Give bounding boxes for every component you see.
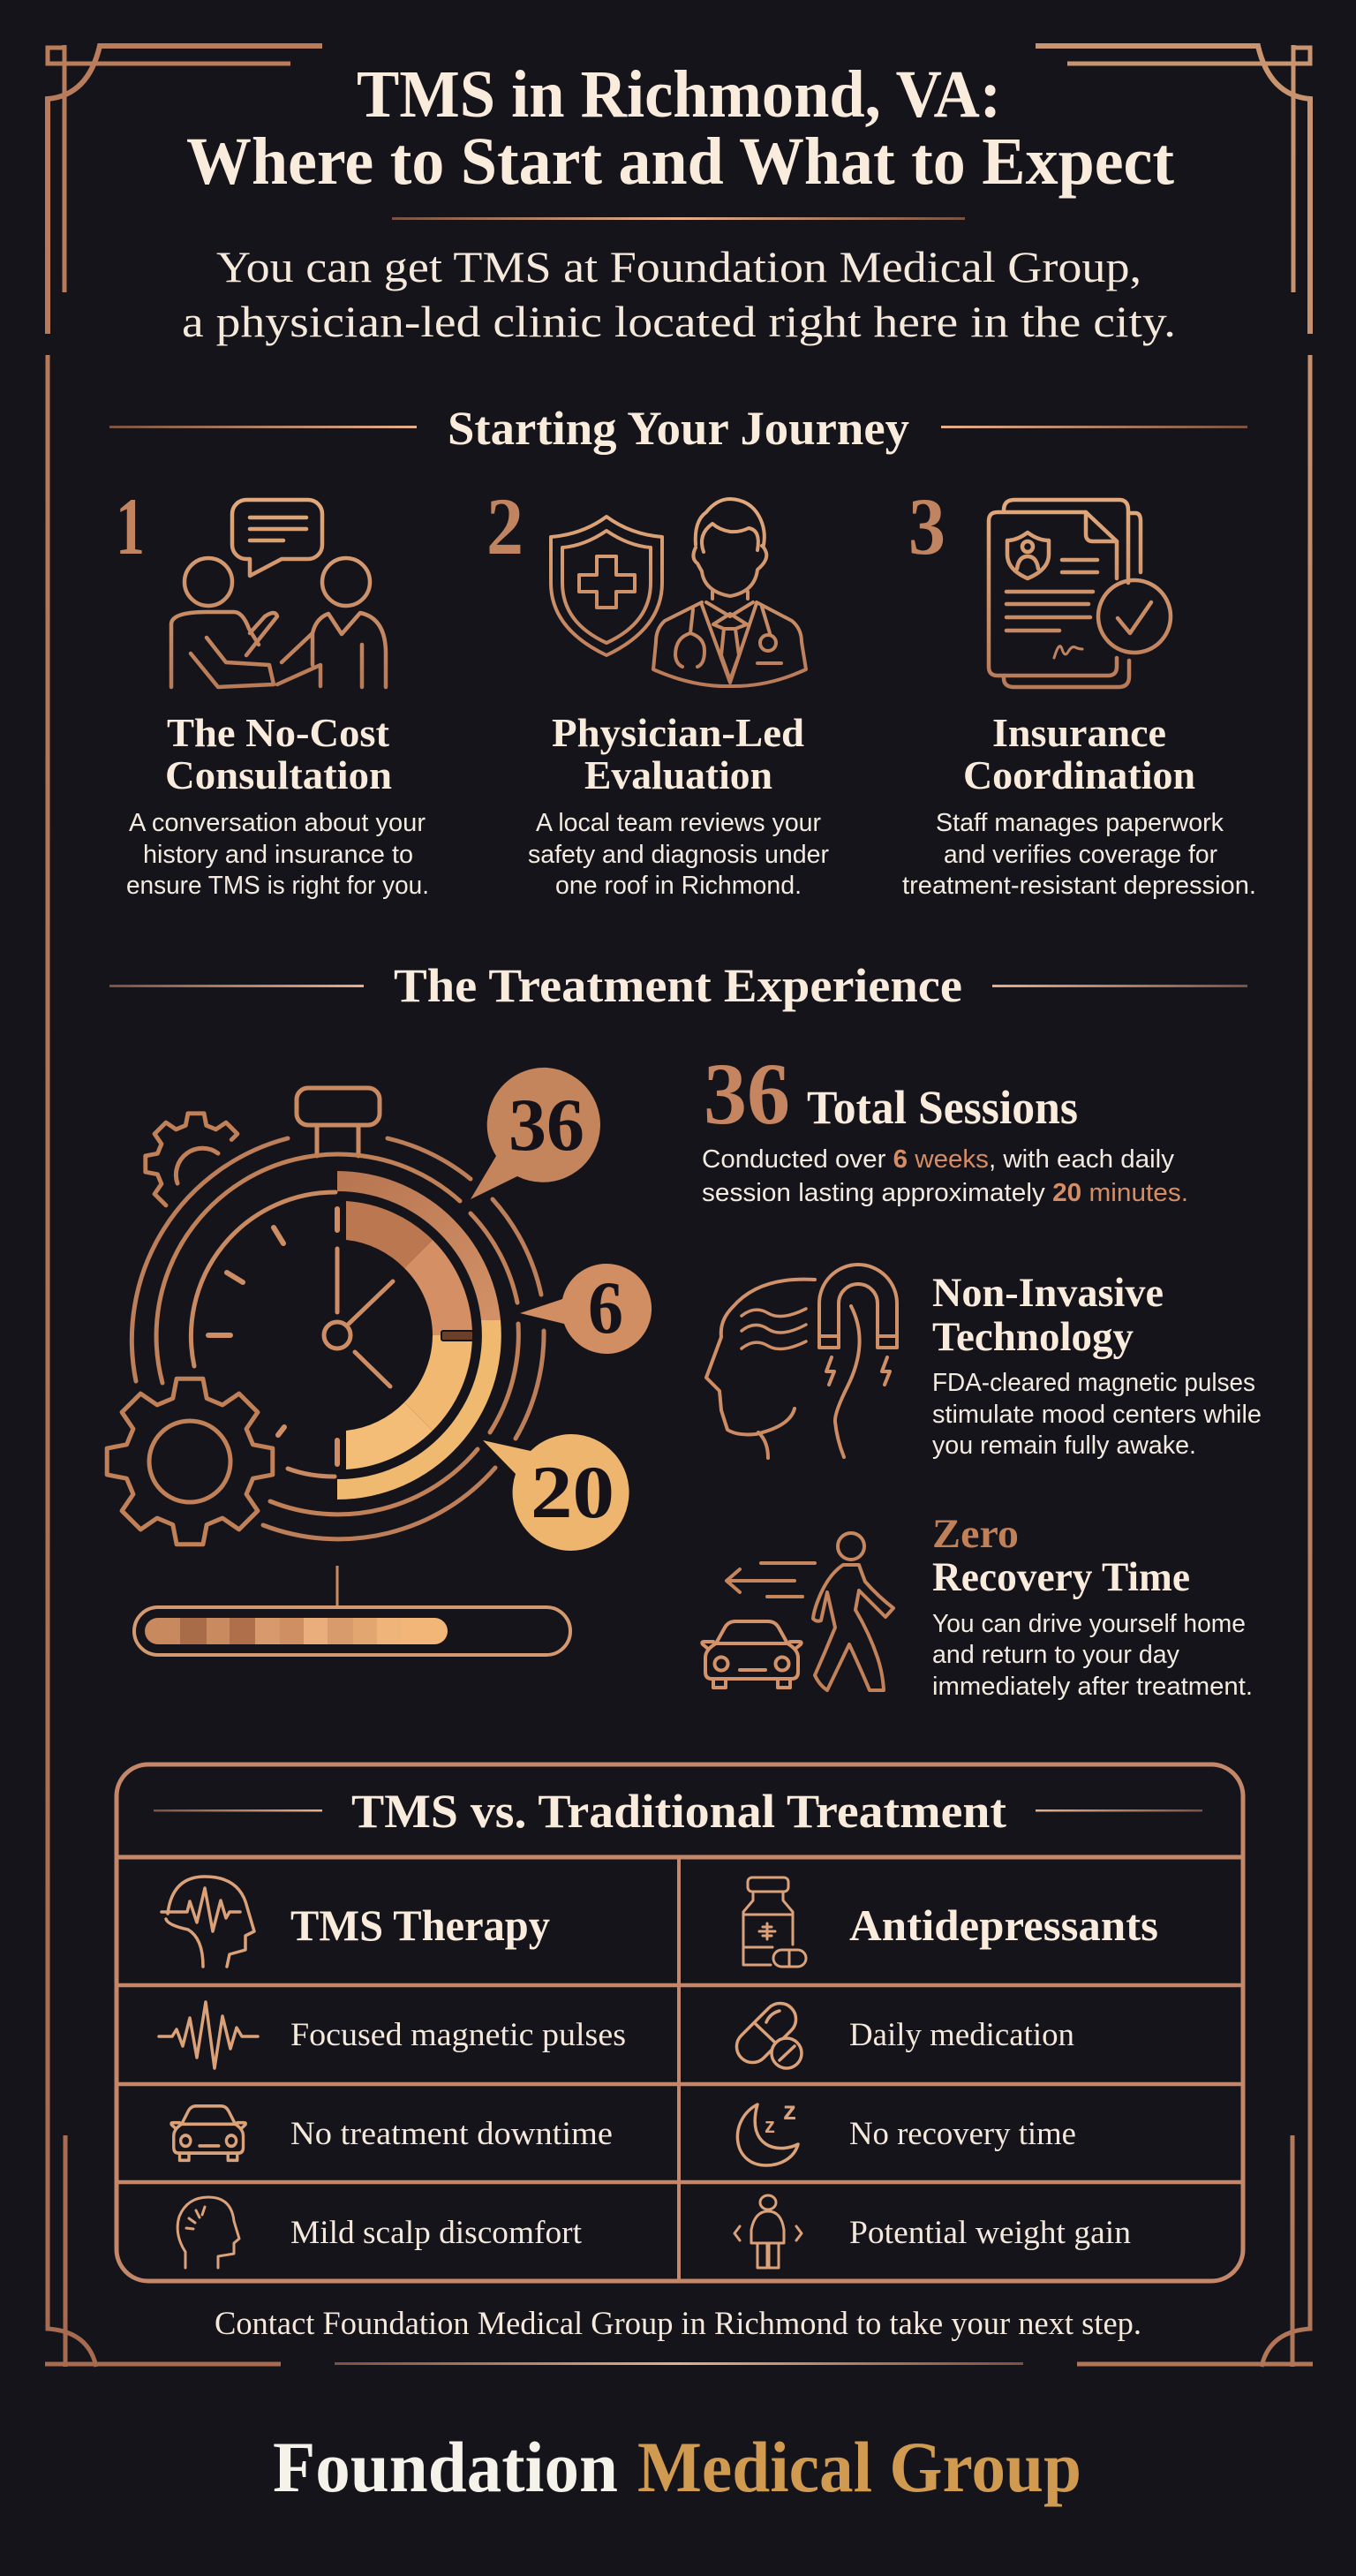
icon: large gear — [107, 1379, 273, 1545]
icon: head and magnet — [706, 1265, 897, 1458]
icon: walking from car — [702, 1533, 893, 1690]
step number 3: 3 — [908, 481, 945, 571]
icon: insurance document — [989, 500, 1171, 687]
frame: bottom centre rule — [335, 2362, 1023, 2365]
feature text — [932, 1610, 1253, 1701]
brand name — [273, 2427, 1081, 2507]
panel: comparison table — [117, 1764, 1243, 2281]
column title: antidepressants: Antidepressants — [849, 1900, 1158, 1950]
title rule — [392, 217, 965, 220]
feature title: Technology — [932, 1314, 1134, 1360]
clock hands and ticks — [208, 1209, 393, 1464]
step title: The No-Cost — [167, 710, 390, 755]
call to action: Contact Foundation Medical Group in Richmond to take your next step. — [215, 2306, 1141, 2342]
step number 1: 1 — [116, 481, 145, 571]
step text — [902, 809, 1256, 900]
step text — [126, 809, 429, 900]
subtitle: a physician-led clinic located right here in the city. — [182, 297, 1176, 346]
panel: step 1 — [116, 481, 429, 900]
chart bands — [337, 1171, 501, 1500]
row text: mild scalp discomfort: Mild scalp discomfort — [290, 2215, 583, 2251]
callout: 36 — [471, 1068, 600, 1199]
callout: 6: 6 — [588, 1266, 623, 1349]
panel: step 3 — [902, 481, 1256, 900]
table grid — [117, 1764, 1243, 2281]
heading: starting your journey: Starting Your Journey — [448, 402, 909, 455]
feature title: Zero — [932, 1511, 1019, 1557]
icon: pulse wave — [159, 2002, 258, 2068]
title — [186, 57, 1174, 199]
feature text: and return to your day — [932, 1641, 1179, 1669]
step text: ensure TMS is right for you. — [126, 872, 429, 900]
row text: focused magnetic pulses: Focused magnetic pulses — [290, 2017, 626, 2053]
brand name: Foundation — [273, 2427, 618, 2507]
frame: right side — [1036, 45, 1313, 2367]
feature text — [932, 1369, 1262, 1460]
feature title — [932, 1511, 1190, 1600]
row text: potential weight gain: Potential weight gain — [849, 2215, 1131, 2251]
row text: no treatment downtime: No treatment downtime — [290, 2116, 613, 2152]
step text: A conversation about your — [129, 809, 426, 837]
subtitle: You can get TMS at Foundation Medical Group, — [216, 242, 1141, 291]
feature text: You can drive yourself home — [932, 1610, 1246, 1638]
feature title: Non-Invasive — [932, 1270, 1164, 1316]
step title — [552, 710, 804, 797]
step title: Consultation — [165, 752, 392, 797]
heading: starting your journey — [109, 402, 1247, 455]
stat: total sessions: session lasting approximately 20 minutes. — [702, 1179, 1188, 1207]
callout: 6 — [520, 1264, 652, 1354]
feature text: immediately after treatment. — [932, 1673, 1253, 1701]
icon: moon: z — [783, 2096, 796, 2126]
brand name: Medical Group — [637, 2427, 1081, 2507]
icon: moon — [737, 2096, 798, 2165]
frame: left side — [45, 45, 322, 2367]
icon: pill bottle — [743, 1877, 806, 1967]
step title: Evaluation — [584, 752, 772, 797]
step text: and verifies coverage for — [944, 841, 1217, 869]
icon: head with scalp marks — [177, 2197, 239, 2268]
callout: 20 — [483, 1434, 629, 1551]
title: Where to Start and What to Expect — [186, 125, 1174, 199]
icon: shield and physician — [551, 499, 806, 686]
feature title: Recovery Time — [932, 1554, 1190, 1600]
icon: small gear — [146, 1114, 237, 1205]
progress bar — [134, 1566, 570, 1655]
heading: the treatment experience — [109, 959, 1247, 1012]
step text: A local team reviews your — [536, 809, 821, 837]
step number 2: 2 — [486, 481, 524, 571]
icon: moon: z — [765, 2114, 775, 2138]
feature text: you remain fully awake. — [932, 1432, 1196, 1460]
panel: zero recovery time — [702, 1511, 1253, 1701]
stat: total sessions — [702, 1045, 1188, 1207]
subtitle — [182, 242, 1176, 346]
table heading: TMS vs. Traditional Treatment — [351, 1785, 1006, 1838]
step title — [963, 710, 1195, 797]
chart: stopwatch — [107, 1068, 652, 1655]
icon: person with weight arrows — [734, 2195, 802, 2268]
step text: Staff manages paperwork — [936, 809, 1224, 837]
icon: head with pulse — [162, 1877, 254, 1967]
feature text: stimulate mood centers while — [932, 1401, 1262, 1429]
step text: history and insurance to — [143, 841, 413, 869]
column title: tms therapy: TMS Therapy — [290, 1900, 550, 1950]
step text — [528, 809, 829, 900]
stopwatch rings — [132, 1088, 544, 1539]
panel: non-invasive technology — [706, 1265, 1262, 1460]
step title: Insurance — [992, 710, 1166, 755]
callout: 20: 20 — [531, 1451, 614, 1534]
icon: car — [171, 2106, 245, 2160]
step title: Physician-Led — [552, 710, 804, 755]
step title — [165, 710, 392, 797]
step title: Coordination — [963, 752, 1195, 797]
stat: total sessions: Conducted over 6 weeks, with each daily — [702, 1145, 1175, 1174]
icon: consultation — [171, 500, 386, 687]
stat: total sessions: 36 — [704, 1045, 790, 1143]
feature title — [932, 1270, 1164, 1360]
stat: total sessions: Total Sessions — [807, 1081, 1078, 1134]
step text: safety and diagnosis under — [528, 841, 829, 869]
icon: pills — [730, 1997, 802, 2069]
title: TMS in Richmond, VA: — [357, 57, 1001, 132]
row text: no recovery time: No recovery time — [849, 2116, 1076, 2152]
heading: the treatment experience: The Treatment Experience — [394, 959, 962, 1012]
row text: daily medication: Daily medication — [849, 2017, 1074, 2053]
feature text: FDA-cleared magnetic pulses — [932, 1369, 1255, 1397]
step text: one roof in Richmond. — [555, 872, 802, 900]
callout: 36: 36 — [508, 1084, 584, 1167]
panel: step 2 — [486, 481, 829, 900]
step text: treatment-resistant depression. — [902, 872, 1256, 900]
